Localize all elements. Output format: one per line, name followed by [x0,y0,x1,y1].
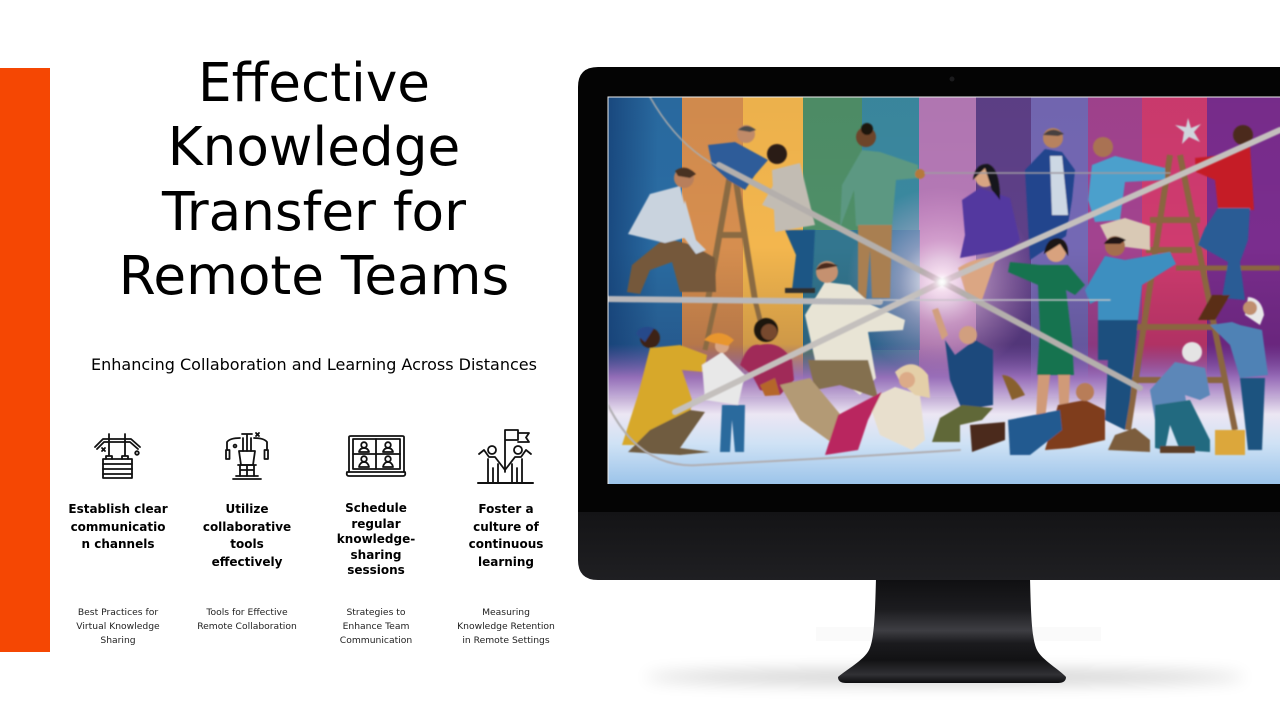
title: Remote Teams [119,245,509,307]
person: man in blue shirt [1085,236,1176,430]
person: man on ladder [708,125,768,190]
person: lying man in brown jacket [970,375,1105,455]
caption: column 4: in Remote Settings [462,635,550,646]
person: man in yellow coat [622,327,710,455]
stones pile [1108,428,1150,452]
caption: column 3: Communication [340,635,412,646]
person: woman in maroon [740,318,794,396]
caption: column 3: Strategies to [346,607,406,618]
heading: column 4: learning [478,554,534,568]
caption: column 3 [340,607,412,646]
heading: column 2: Utilize [226,502,268,516]
heading: column 4: Foster a [478,502,534,516]
heading: column 3: knowledge- [337,532,415,546]
screen illustration [608,97,1280,484]
heading: column 1 [68,502,168,551]
heading: column 4 [469,502,543,568]
icon: communication channels [94,433,141,479]
caption: column 4 [457,607,555,646]
accent bar [0,68,50,652]
heading: column 2: collaborative [203,520,291,534]
icon: video meeting laptop [346,435,406,477]
heading: column 3: Schedule [345,501,407,515]
person: man in light blue [1088,137,1165,250]
monitor mockup [578,67,1280,692]
title [119,52,509,307]
person: crouching man [627,168,716,294]
person: man in white shirt [780,261,905,445]
heading: column 3 [337,501,415,577]
title: Effective [198,52,430,114]
icon: collaborative tools [225,432,269,480]
heading: column 4: continuous [469,537,543,551]
person: woman with white headscarf [1210,297,1268,455]
caption: column 1: Sharing [100,635,136,646]
heading: column 1: communicatio [71,520,165,534]
heading: column 2: effectively [212,554,282,568]
caption: column 1 [76,607,160,646]
heading: column 1: Establish clear [68,502,168,516]
caption: column 1: Virtual Knowledge [76,621,160,632]
caption: column 4: Knowledge Retention [457,621,555,632]
crossing ropes [608,97,1280,465]
person: woman in purple dress [958,164,1020,300]
caption: column 2: Tools for Effective [206,607,288,618]
subtitle: Enhancing Collaboration and Learning Across Distances [91,355,537,374]
heading: column 3: regular [351,516,401,530]
caption: column 3: Enhance Team [343,621,409,632]
desk shadow [645,627,1245,684]
person: man in red [1175,118,1254,320]
monitor stand [838,578,1066,683]
heading: column 2 [203,502,291,568]
caption: column 2 [197,607,297,632]
person: woman in green dress [1008,238,1085,420]
background colour stripes [608,97,1280,484]
title: Transfer for [162,181,466,243]
icon: team with flag [477,429,534,484]
person: man in suit [1025,128,1075,260]
caption: column 4: Measuring [482,607,530,618]
person: man in navy hoodie [932,308,993,442]
heading: column 3: sessions [347,563,405,577]
heading: column 4: culture of [473,520,539,534]
person: woman in green shirt [840,123,925,300]
person: boy in grey sweater [762,144,815,293]
heading: column 2: tools [230,537,264,551]
caption: column 2: Remote Collaboration [197,621,297,632]
screen top edge highlight [608,97,1280,484]
heading: column 1: n channels [82,537,154,551]
person: child with orange cap [702,333,745,452]
person: blonde woman [825,364,930,455]
person: kneeling man [1150,342,1210,453]
heading: column 3: sharing [351,548,401,562]
monitor body [578,67,1280,580]
right ladder [1128,155,1280,430]
left ladder [705,175,765,350]
title: Knowledge [168,116,460,178]
caption: column 1: Best Practices for [78,607,158,618]
